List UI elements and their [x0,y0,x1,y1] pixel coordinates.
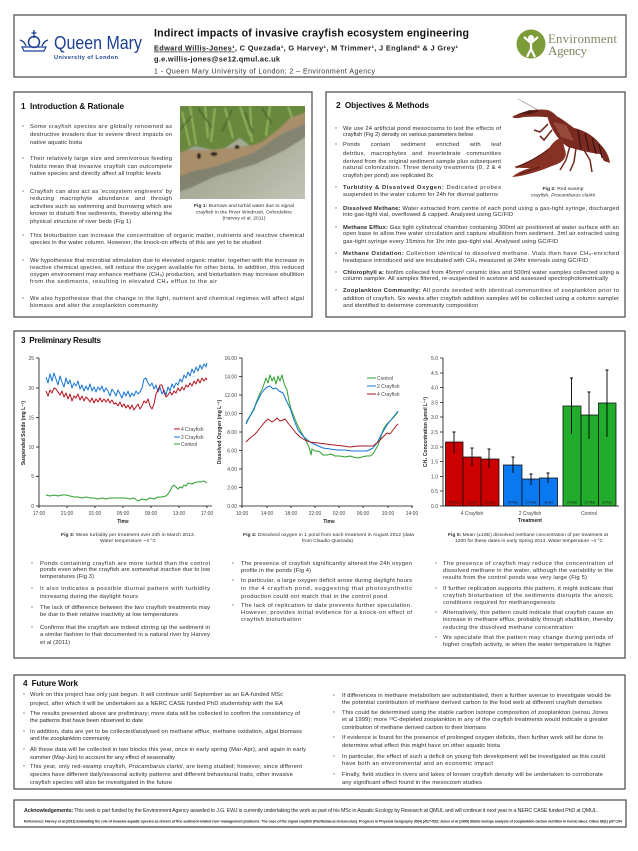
caption: figure 5: 1200 for these dates in early Spring 2013. Water temperature ~4 °C [455,538,603,544]
chart: turbidity line chart: 21:00 [61,511,73,517]
legend: turbidity: 2 Crayfish [181,435,204,441]
chart: methane bar chart: 27 Mar [585,500,596,504]
bullet: This year, only red-swamp crayfish, Procambarus clarkii, are being studied; however, since different [30,764,302,770]
bullet [22,296,304,309]
bullet [31,561,211,580]
bullet: The presence of crayfish may reduce the concentration of [443,561,613,567]
bullet: increase in methane efflux, probably through ebullition, thereby [443,617,613,623]
bullet: habits mean that invasive crayfish can outcompete [30,164,172,170]
logo: Environment Agency: Environment [548,31,617,46]
bullet: Their relatively large size and omnivorous feeding [30,156,172,162]
bullet: column sampler. All samples filtered, re-suspended in acetone and assessed spectrophotometrically [343,276,608,282]
bullet: Ponds containing crayfish are more turbid than the control [40,561,210,567]
bullet: crayfish species will also be investigated in the future [30,780,172,786]
bullet: species in the water column. However, the knock-on effects of this are yet to be studied [30,240,261,246]
chart: turbidity line chart: 5 [31,474,34,480]
bullet: results from the control ponds was very large (Fig 5) [443,575,587,581]
bullet: and identified to determine community composition [343,303,478,309]
chart: dissolved oxygen line chart: 10:00 [236,511,248,517]
panel: introduction and rationale [14,92,312,317]
legend: dissolved oxygen [367,376,400,398]
legend: dissolved oxygen: 2 Crayfish [377,384,400,390]
chart: dissolved oxygen line chart: 16.00 [224,356,237,362]
bullet: et al (2011) [40,640,70,646]
bullet: In particular, the effect of such a deficit on young fish development will be investigated as this could [342,754,605,760]
chart: turbidity line chart: 20 [28,386,34,392]
bullet: and the zooplankton community [30,736,110,742]
bullet [435,561,613,581]
legend: turbidity: 4 Crayfish [181,427,204,433]
bullet [23,711,300,724]
bullet [333,693,611,706]
chart: dissolved oxygen line chart: 2.00 [227,486,237,492]
bullet: conditions required for methanogenesis [443,600,555,606]
acknowledgements: Acknowledgements: This work is part funded by the Environment Agency awarded to J.G. EWJ is currently undertaking the work as part of his MSc in Aquatic Ecology by Research at QMUL and will continue it next year in a NERC CASE funded PhD at QMUL. [24,808,598,814]
bullet: have both an environmental and an economic impact [342,761,493,767]
bullet [333,772,603,786]
caption: figure 4: Fig 4: Dissolved oxygen in 1 pond from each treatment in August 2012 (data [243,532,414,538]
bullet [335,126,501,138]
bullet [333,754,605,767]
chart: turbidity line chart: 25 [28,356,34,362]
chart: turbidity line chart: 17:00 [33,511,45,517]
legend: turbidity [174,427,204,448]
bullet: destructive invaders due to severe direct impacts on [30,132,172,138]
chart: methane bar chart: 0.5 [431,489,438,495]
illustration: red swamp crayfish [512,99,610,177]
chart: dissolved oxygen line chart: 12.00 [224,393,237,399]
bullet [22,233,304,246]
bullet: known to disturb fine sediments, thereby altering the [30,211,172,217]
bullet: We hypothesise that microbial stimulation due to elevated organic matter, together with the increase in [30,258,304,264]
bullet [335,142,502,179]
logo: Queen Mary: Queen Mary [54,32,143,53]
bars: 4 crayfish [446,442,499,506]
bullet [333,735,603,749]
chart: dissolved oxygen line chart: 14.00 [224,374,237,380]
caption: figure 1: (Harvey et al. 2011) [222,216,266,222]
bullet: species have different daily/seasonal activity patterns and different behavioural traits, other invasive [30,772,293,778]
bullet: If differences in methane metabolism are substantiated, then a further avenue to investigate would be [342,693,611,699]
bullet [22,156,172,177]
bullet: It also indicates a possible diurnal pattern with turbidity [40,586,210,592]
bars: 2 crayfish [504,465,558,506]
bullet: increasing during the daylight hours [40,594,138,600]
caption: figure 1: crayfish in the River Windrush, Oxfordshire [196,210,292,216]
chart: methane bar chart: 4.5 [431,371,438,377]
chart: dissolved oxygen line chart: 18:00 [285,511,297,517]
bullet: reactive chemical species, will reduce the oxygen available for other biota. In addition, this reduced [30,265,304,271]
bullet: the patterns that have been observed to date [30,718,143,724]
title: Indirect impacts of invasive crayfish ecosystem engineering [154,28,469,40]
chart: methane bar chart: 20 Mar [449,500,460,504]
bullet: open base to allow free water circulation and capture ebullition from sediment. 3ml air extracted using [343,231,619,237]
chart: dissolved oxygen line chart: 10.00 [224,412,237,418]
bullet: In particular, a large oxygen deficit arose during daylight hours [241,578,412,584]
logo: Queen Mary [20,30,143,61]
bullet: The results presented above are preliminary; more data will be collected to confirm the consistency of [30,711,300,717]
bullet: dissolved methane in the water, although the variability in the [443,568,613,574]
bullet: the potential contribution of methane derived carbon to the food web at different crayfish densities [342,700,602,706]
bullet [31,625,210,646]
chart: dissolved oxygen line chart: 22:00 [309,511,321,517]
bullet: et al 1999); more ¹³C-depleted zooplankton in any of the crayfish treatments would indicate a greater [342,717,608,723]
chart: methane bar chart: 5.0 [431,356,438,362]
bullet: We speculate that the pattern may change during periods of [443,635,613,641]
bullet [31,605,210,618]
heading: results: 3 Preliminary Results [21,336,101,345]
panel: future work [14,675,625,789]
chart: methane bar chart: 03 Apr [602,500,613,504]
caption: figure 3: Fig 3: Mean turbidity per treatment over 24h in March 2013. [61,532,195,538]
bullet: reducing macrophyte abundance and through [30,196,172,202]
chart: dissolved oxygen line chart: 10:00 [382,511,394,517]
bullet: If further replication supports this pattern, it might indicate that [443,586,613,592]
bullet: native species and directly affect all trophic levels [30,171,161,177]
chart: methane bar chart: 1.5 [431,460,438,466]
heading: future work: 4 Future Work [23,679,78,688]
caption: figure 5 [448,532,609,544]
chart: methane bar chart: 27 Mar [526,500,537,504]
chart: methane bar chart: 3.5 [431,400,438,406]
bullet: Confirms that the crayfish are indeed stirring up the sediment in [40,625,210,631]
chart: methane bar chart: 3.0 [431,415,438,421]
caption: figure 3 [61,532,195,544]
legend: dissolved oxygen: Control [377,376,393,382]
bullet: crayfish bioturbation of the sediments disrupts the anoxic [443,593,613,599]
bullet: Dissolved Methane: Water extracted from centre of each pond using a gas-tight syringe, discharged [343,206,619,212]
bullet: crayfish (Fig 2) density on various parameters below [343,132,474,138]
chart: dissolved oxygen line chart: 0.00 [227,504,237,510]
caption: figure 1 [194,203,294,222]
bullet: Alternatively, this pattern could indicate that crayfish cause an [443,610,613,616]
chart: dissolved oxygen line chart: 14:00 [261,511,273,517]
chart: methane bar chart: 27 Mar [467,500,478,504]
bullet: detritus, macrophytes and invertebrate communities [343,151,501,157]
bullet: Finally, field studies in rivers and lakes of known crayfish density will be undertaken to corroborate [342,772,603,778]
heading: introduction: 1 Introduction & Rationale [21,102,124,111]
bullet [31,586,210,600]
chart: methane bar chart: Control [581,511,597,517]
bullet: crayfish bioturbation [241,617,301,623]
header panel [14,15,626,77]
bullet [435,610,613,631]
chart: dissolved oxygen line chart: Time [323,519,335,525]
bullet: biomass and alter the zooplankton community [30,303,158,309]
bullet: ponds even when the crayfish are somewhat inactive due to low [40,567,211,573]
chart: dissolved oxygen line chart: Dissolved Oxygen (mg L⁻¹) [217,400,223,464]
bullet [23,692,283,707]
chart: turbidity line chart: Time [117,519,129,525]
email: g.e.willis-jones@se12.qmul.ac.uk [154,54,281,64]
chart: methane bar chart: 20 Mar [508,500,519,504]
bullet: crayfish per pond) are replicated 8x [343,173,433,179]
bullet: in the 4 crayfish pond, suggesting that photosynthetic [241,586,412,592]
bullet: project, after which it will be undertaken as a NERC CASE funded PhD studentship with the EA [30,701,283,707]
bullet [23,747,306,761]
logo: Environment Agency [516,30,617,58]
chart: methane bar chart: 2.5 [431,430,438,436]
bullet: Crayfish can also act as 'ecosystem engineers' by [30,189,172,195]
bullet: derived from the original sediment sample plus subsequent [343,159,501,165]
bullet [335,206,619,218]
chart: dissolved oxygen line chart: 8.00 [227,430,237,436]
chart: methane bar chart: 03 Apr [485,500,496,504]
bullet: We use 24 artificial pond mesocosms to test the effects of [343,126,501,132]
bullet: Turbidity & Dissolved Oxygen: Dedicated probes [343,185,501,191]
chart: methane bar chart: 1.0 [431,474,438,480]
bullet: If evidence is found for the presence of prolonged oxygen deficits, then further work will be done to [342,735,603,741]
caption: figure 2: Fig 2: Red swamp [542,186,584,192]
bullet [22,124,172,146]
legend: turbidity: Control [181,442,197,448]
bullet [232,578,412,600]
heading: objectives: 2 Objectives & Methods [336,101,429,110]
bullet: Methane Oxidation: Collection identical to dissolved methane. Vials then have CH₄-enriched [343,251,619,257]
bars: control [563,403,616,506]
bullet: reducing the dissolved methane concentration [443,625,573,631]
caption: figure 5: Fig 5: Mean (±1SE) dissolved methane concentration of per treatment at [448,532,609,538]
panel: preliminary results [14,331,625,658]
chart: turbidity line chart: 0 [31,504,34,510]
bullet: Chlorophyll a: biofilm collected from 45mm² ceramic tiles and 500ml water samples collected using a [343,270,620,276]
bullet: The presence of crayfish significantly altered the 24h oxygen [241,561,412,567]
chart: methane bar chart: 20 Mar [567,500,578,504]
logo: Queen Mary: University of London [54,55,119,61]
chart: methane bar chart: 4 Crayfish [461,511,483,517]
chart: dissolved oxygen line chart: 6.00 [227,448,237,454]
chart: methane bar chart: CH₄ Concentration (µmol L⁻¹) [423,397,429,467]
bullet [232,561,412,574]
photo: crayfish burrows in river bank [178,104,307,201]
bullet: headspace introduced and are incubated with CH₄ measured at 24hr intervals using GC/FID [343,258,588,264]
panel: objectives and methods [326,92,625,317]
bullet [232,603,412,623]
chart: methane bar chart [423,356,619,524]
bullet [23,764,302,786]
caption: figure 4: from Claudio Quezada) [302,538,353,544]
panel: acknowledgements and references [14,800,626,827]
bullet: any significant effect found in the mesocosm studies [342,780,482,786]
bullet: into gas-tight vial, overflowed & capped. Analysed using GC/FID [343,212,513,218]
bullet: contribution of methane derived carbon to their biomass [342,725,486,731]
bullet [335,288,619,309]
bullet: oxygen environment may enhance methane (CH₄) production, and bioturbation may increase ebullition [30,272,304,278]
bullet: from the sediments, resulting in elevated CH₄ efflux to the air [30,279,217,285]
bullet: gas-tight syringe every 15mins for 1hr into gas-tight vial. Analysed using GC/FID [343,239,558,245]
bullet: addition of crayfish. Six weeks after crayfish addition samples will be collected using a column sampler [343,296,619,302]
bullet [22,189,172,225]
chart: turbidity line chart: 05:00 [117,511,129,517]
chart: dissolved oxygen line chart: 06:00 [357,511,369,517]
bullet: Work on this project has only just begun. It will continue until September as an EA-funded MSc [30,692,283,698]
caption: figure 3: Water temperature ~4 °C [100,538,156,544]
bullet: activities such as swimming and burrowing which are [30,204,172,210]
bullet: native aquatic biota [30,140,83,146]
bullet [333,710,608,731]
bullet: In addition, data are yet to be collected/analysed on methane efflux, methane oxidation, algal biomass [30,729,302,735]
chart: dissolved oxygen line chart: 14:00 [406,511,418,517]
caption: figure 4 [243,532,414,544]
bullet: All these data will be collected in two blocks this year, once in early spring (Mar-Apr), and again in early [30,747,306,753]
bullet: profile in the ponds (Fig 4) [241,568,311,574]
chart: turbidity line chart: 01:00 [89,511,101,517]
bullet: be due to their relative inactivity at low temperatures [40,612,178,618]
logo: Environment Agency: Agency [548,43,588,58]
bullet: Some crayfish species are globally renowned as [30,124,172,130]
bullet: natural colonization. Three density treatments (0, 2 & 4 [343,165,502,171]
bullet: The lack of difference between the two crayfish treatments may [40,605,210,611]
chart: methane bar chart: 2.0 [431,445,438,451]
chart: turbidity line chart: 13:00 [173,511,185,517]
bullet: physical structure of river beds (Fig 1) [30,219,131,225]
bullet: a similar fashion to that documented in a natural river by Harvey [40,632,210,638]
chart: methane bar chart: 2 Crayfish [519,511,541,517]
bullet: This bioturbation can increase the concentration of organic matter, nutrients and reactive chemical [30,233,304,239]
bullet [335,225,619,245]
bullet: We also hypothesise that the change in the light, nutrient and chemical regimes will affect algal [30,296,304,302]
legend: dissolved oxygen: 4 Crayfish [377,392,400,398]
chart: dissolved oxygen line chart: 4.00 [227,467,237,473]
bullet [335,185,501,198]
chart: methane bar chart: 03 Apr [544,500,554,504]
caption: figure 2 [531,186,596,198]
bullet: Zooplankton Community: All ponds seeded with identical communities of zooplankton prior to [343,288,619,294]
chart: turbidity line chart: 09:00 [145,511,157,517]
bullet: higher crayfish activity, ie when the water temperature is higher [443,642,611,648]
bullet [335,270,620,282]
chart: turbidity line chart: 15 [28,416,34,422]
chart: turbidity line chart [21,356,213,525]
caption: figure 2: crayfish, Procambarus clarkii [531,192,596,198]
chart: methane bar chart: 0.0 [431,504,438,510]
caption: figure 1: Fig 1: Burrows and turbid water due to signal [194,203,294,209]
bullet [22,258,304,285]
affiliations: 1 - Queen Mary University of London; 2 – Environment Agency [154,68,376,76]
bullet: production could not match that in the control pond [241,594,387,600]
chart: turbidity line chart: 17:00 [201,511,213,517]
bullet: This could be determined using the stable carbon isotope composition of zooplankton (sensu Jones [342,710,608,716]
bullet [435,586,613,606]
bullet: temperatures (Fig 3) [40,574,94,580]
chart: dissolved oxygen line chart [217,356,418,525]
bullet [335,251,619,264]
bullet: summer (May-Jun) to account for any effect of seasonality [30,755,175,761]
bullet [23,729,302,742]
bullet: Ponds contain sediment enriched with leaf [343,142,501,148]
authors: Edward Willis-Jones¹, C Quezada¹, G Harvey¹, M Trimmer¹, J England² & J Grey¹ [154,44,459,52]
chart: dissolved oxygen line chart: 02:00 [333,511,345,517]
references: References: Harvey et al (2011) Evaluating the role of invasive aquatic species as drivers of fine sediment-related river management problems: The case of the signal crayfish (Pacifastacus leniusculus). Progress in Physical Geography 35(4) p517-533; Jones et al (1999) Stable isotope analysis of zooplankton carbon nutrition in humic lakes. Oikos 86(1) p97-104 [24,820,623,824]
bullet: The lack of replication to date prevents further speculation. [241,603,412,609]
bullet: suspended in the water column for 24h for diurnal patterns [343,192,498,198]
chart: methane bar chart: Treatment [518,518,542,524]
chart: turbidity line chart: 10 [28,445,34,451]
bullet [435,635,613,648]
bullet: determine what effect this might have on other aquatic biota [342,743,501,749]
chart: turbidity line chart: Suspended Solids (mg L⁻¹) [21,401,27,465]
bullet: However, provides initial evidence for a knock-on effect of [241,610,412,616]
chart: methane bar chart: 4.0 [431,386,438,392]
bullet: Methane Efflux: Gas tight cylindrical chamber containing 300ml air positioned at water surface with an [343,225,619,231]
